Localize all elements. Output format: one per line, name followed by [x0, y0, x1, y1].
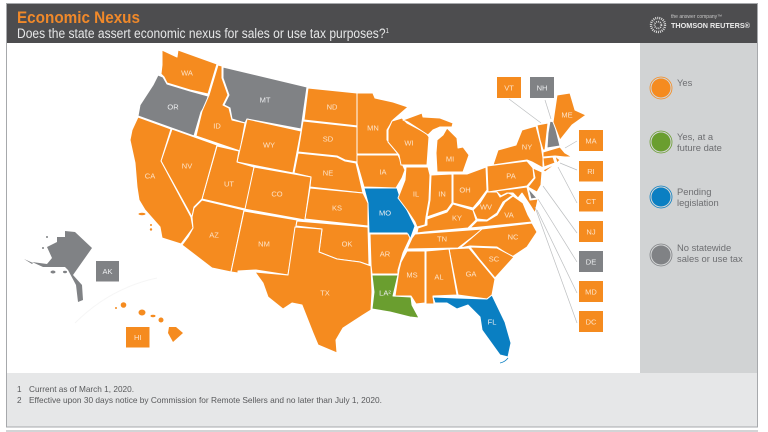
state: DE	[528, 188, 537, 199]
state: KY: KY	[452, 214, 462, 222]
state: TX: TX	[320, 288, 330, 298]
state: WA	[161, 50, 217, 94]
state: MI	[403, 113, 469, 172]
state: IA	[357, 155, 405, 188]
state: SC	[470, 247, 514, 278]
label box: NJ	[579, 221, 603, 242]
state: NY: NY	[522, 142, 532, 152]
state: NV	[161, 129, 217, 217]
state: CA	[130, 117, 193, 244]
state: SC: SC	[489, 254, 500, 264]
state: IA: IA	[379, 168, 387, 176]
icon: California islands	[138, 213, 152, 231]
state: PA	[487, 161, 534, 192]
label box: CT	[579, 191, 603, 212]
state: ME	[553, 93, 586, 140]
state: VA: VA	[504, 210, 514, 220]
state: ID: ID	[213, 122, 221, 130]
state: CO: CO	[271, 190, 283, 198]
state: MT: MT	[260, 96, 271, 104]
state: SD: SD	[323, 134, 334, 144]
state: MS	[395, 251, 425, 304]
state: AZ: AZ	[209, 230, 219, 240]
state: MN: MN	[367, 124, 379, 132]
logo: Thomson Reuters: the answer company™	[671, 14, 722, 20]
state: NE: NE	[323, 168, 333, 178]
state: LA: LA²	[379, 288, 391, 298]
label box: MA	[579, 130, 603, 151]
label box: AK	[96, 261, 119, 282]
state: NC	[460, 223, 537, 257]
state: IN	[427, 174, 452, 217]
state: AZ	[182, 200, 244, 272]
label box: VT	[497, 77, 521, 98]
state: AL: AL	[434, 272, 444, 282]
state: OH	[453, 167, 487, 208]
panel: sidebar legend background	[640, 43, 757, 373]
legend item: Yes, at a future date: future date	[677, 142, 722, 153]
label box: HI: HI	[134, 333, 141, 342]
label box: HI	[126, 327, 150, 348]
state: WY	[237, 119, 301, 173]
map: contiguous United States	[130, 50, 586, 357]
state: TX	[255, 227, 372, 353]
leader lines	[509, 99, 577, 323]
state: MO	[364, 188, 415, 240]
legend item: No statewide sales or use tax	[650, 242, 743, 266]
subtitle: Does the state assert economic nexus for sales or use tax purposes?	[17, 26, 430, 41]
logo: Thomson Reuters	[651, 14, 751, 32]
state: VT	[537, 123, 548, 150]
legend item: No statewide sales or use tax: No statewide	[677, 242, 731, 253]
state: WI	[388, 118, 429, 165]
state: NM: NM	[258, 240, 270, 248]
state: ND: ND	[327, 102, 338, 112]
icon: Florida keys	[500, 358, 508, 363]
state: TN: TN	[437, 234, 447, 244]
state: MT	[223, 67, 307, 129]
label box: MA: MA	[585, 136, 597, 146]
state: MS: MS	[406, 270, 418, 280]
state: OH: OH	[459, 186, 471, 194]
state: ID	[196, 65, 245, 151]
state: UT: UT	[224, 180, 234, 188]
state: NE	[294, 153, 363, 193]
label box: DE: DE	[586, 258, 596, 266]
label box: DC	[579, 311, 603, 332]
legend item: Pending legislation: Pending	[677, 186, 711, 197]
state: CT	[543, 157, 555, 167]
label box: DE	[579, 251, 603, 272]
label box: NH	[530, 77, 554, 98]
state: IL	[398, 167, 430, 227]
state: MA	[543, 147, 572, 157]
state: MI: MI	[446, 154, 454, 164]
legend item: Pending legislation	[650, 186, 719, 208]
label box: AK: AK	[102, 267, 113, 276]
panel: header bar	[7, 4, 757, 43]
state: CA: CA	[145, 172, 155, 180]
footnotes: 1	[17, 385, 22, 394]
state: VA	[470, 196, 532, 228]
map: Alaska	[24, 231, 92, 302]
state: ND	[304, 88, 358, 126]
state: GA	[449, 248, 495, 299]
state: OK	[296, 221, 369, 265]
label box: NJ: NJ	[586, 228, 596, 236]
state: MN	[357, 91, 408, 154]
state: WA: WA	[181, 68, 193, 78]
title: Economic Nexus	[17, 8, 140, 27]
map: Hawaii	[115, 302, 183, 342]
state: FL: FL	[488, 318, 496, 326]
label box: RI: RI	[587, 167, 595, 176]
label box: VT: VT	[504, 84, 514, 92]
label box: MD	[579, 281, 603, 302]
state: UT	[202, 146, 254, 209]
legend item: Yes: Yes	[677, 77, 693, 88]
state: NV: NV	[182, 162, 192, 170]
label box: NH: NH	[537, 84, 547, 92]
footnotes	[17, 385, 382, 405]
state: WI: WI	[404, 138, 414, 148]
state: GA: GA	[466, 270, 476, 278]
state: OR	[138, 75, 208, 136]
state: OK: OK	[342, 240, 352, 248]
state: NY	[493, 126, 557, 172]
panel: footnotes background	[7, 373, 757, 427]
state: AR: AR	[380, 250, 391, 258]
state: FL	[433, 295, 511, 357]
state: NC: NC	[508, 232, 519, 242]
state: WV	[473, 192, 513, 220]
legend item: Yes	[650, 77, 693, 99]
footnotes: Current as of March 1, 2020.	[29, 385, 134, 394]
label box: CT: CT	[586, 197, 596, 206]
state: AR	[370, 234, 410, 274]
legend item: Yes, at a future date: Yes, at a	[677, 131, 714, 142]
state: AL	[426, 249, 457, 304]
legend item: Yes, at a future date	[650, 131, 722, 153]
legend item: No statewide sales or use tax: sales or use tax	[677, 253, 743, 264]
state: WY: WY	[263, 140, 275, 150]
footnotes: 2	[17, 396, 22, 405]
label box: DC: DC	[586, 318, 597, 326]
state: TN	[407, 229, 483, 249]
label box: RI	[579, 161, 603, 182]
state: KY	[417, 204, 476, 233]
state: IN: IN	[438, 190, 446, 198]
label box: MD: MD	[585, 288, 597, 296]
footnotes: Effective upon 30 days notice by Commission for Remote Sellers and no later than July 1, 2020.	[29, 396, 382, 405]
state: RI	[555, 156, 560, 163]
state: OR: OR	[167, 102, 179, 112]
state: NJ	[528, 168, 542, 192]
state: WV: WV	[480, 202, 492, 212]
state: KS: KS	[332, 204, 342, 212]
state: KS	[305, 188, 368, 226]
state: IL: IL	[413, 190, 419, 198]
state: LA	[372, 275, 419, 318]
state: MD	[488, 187, 538, 213]
logo: Thomson Reuters: THOMSON REUTERS®	[671, 22, 751, 30]
legend item: Pending legislation: legislation	[677, 197, 719, 208]
state: ME: ME	[561, 110, 573, 120]
state: CO	[244, 167, 311, 220]
state: MO: MO	[379, 208, 391, 218]
state: SD	[298, 121, 358, 162]
state: PA: PA	[506, 172, 516, 180]
state: NM	[231, 211, 297, 275]
subtitle: 1	[386, 28, 389, 35]
legend	[650, 77, 743, 266]
state: NH	[547, 121, 560, 148]
